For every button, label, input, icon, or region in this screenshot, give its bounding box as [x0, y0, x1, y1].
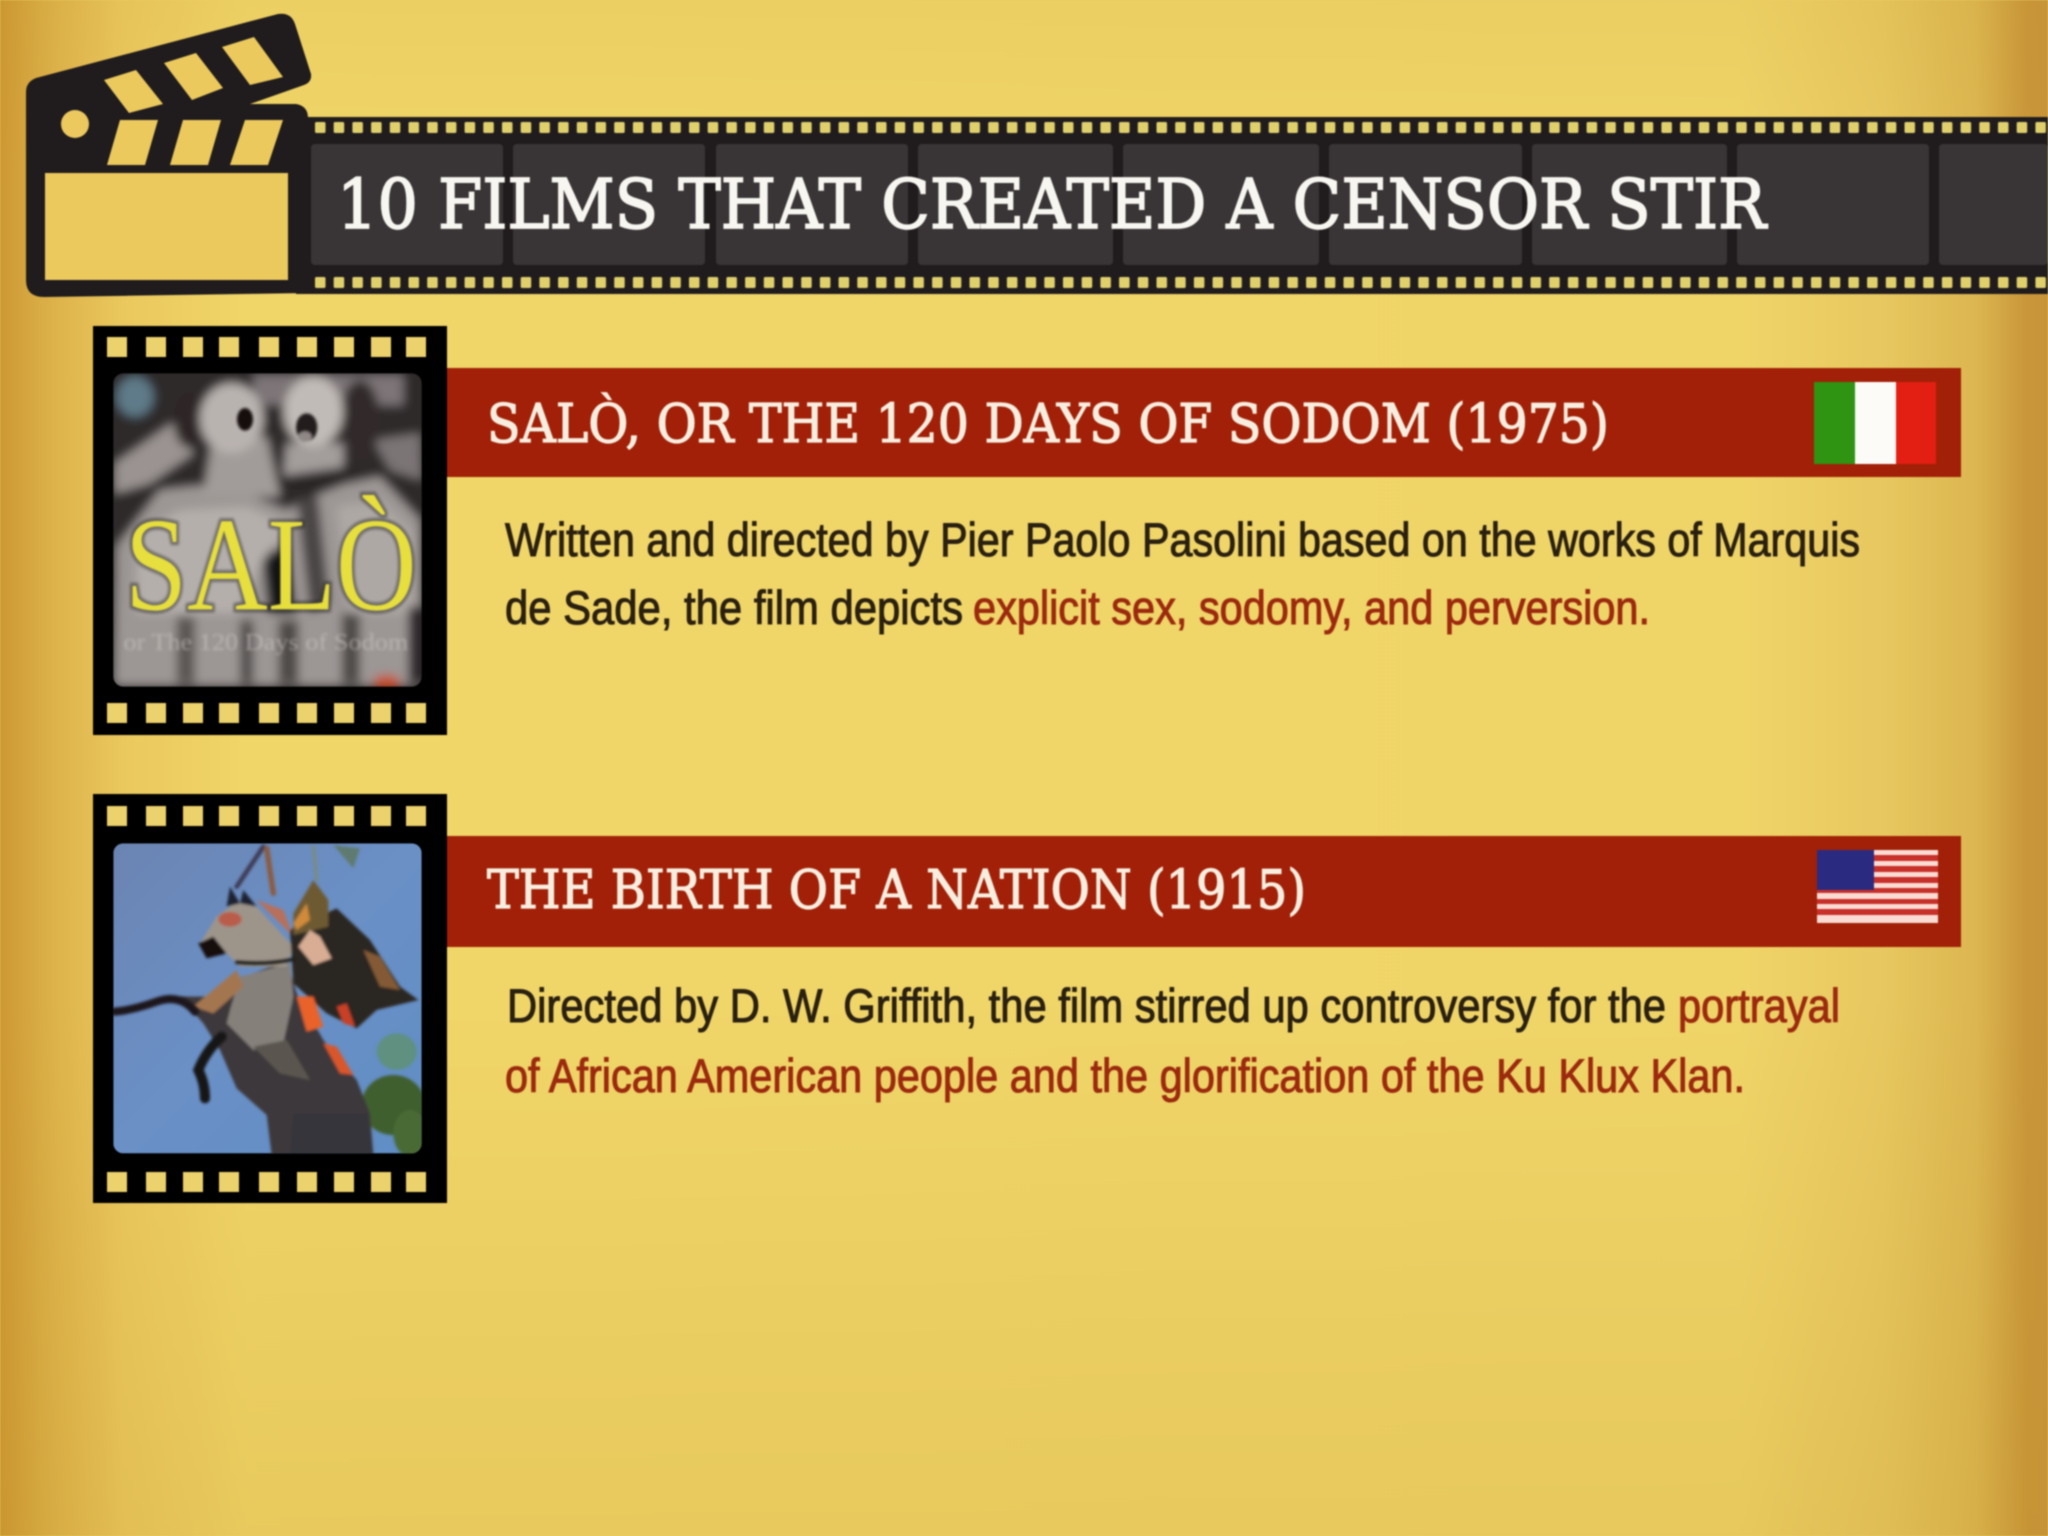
- red title bar: [447, 836, 1961, 947]
- description: Directed by D. W. Griffith, the film stirred up controversy for the: [507, 979, 1666, 1032]
- description: portrayal: [1678, 979, 1840, 1032]
- header banner: [26, 14, 2048, 297]
- panel: The Birth of a Nation: [93, 794, 1961, 1203]
- film frame with poster: [93, 794, 447, 1203]
- film title: THE BIRTH OF A NATION (1915): [487, 860, 1306, 921]
- description: of African American people and the glorification of the Ku Klux Klan.: [505, 1049, 1745, 1102]
- icon: US flag: [1817, 850, 1938, 923]
- poster title text fill: SALÒ: [125, 490, 417, 638]
- poster: rider on rearing horse: [113, 843, 427, 1157]
- description: [505, 979, 1840, 1102]
- description: [505, 513, 1860, 634]
- title: 10 FILMS THAT CREATED A CENSOR STIR: [337, 166, 1768, 245]
- poster subtitle text: or The 120 Days of Sodom: [123, 629, 408, 656]
- red title bar: [447, 368, 1961, 477]
- panel: Salo: [93, 326, 1961, 735]
- icon: clapperboard: [26, 14, 311, 297]
- poster title shadow: SALÒ: [125, 490, 417, 638]
- poster: Salo: [107, 367, 428, 693]
- film title: SALÒ, OR THE 120 DAYS OF SODOM (1975): [487, 393, 1609, 455]
- film strip: [296, 117, 2048, 294]
- description: de Sade, the film depicts: [505, 581, 963, 634]
- description: explicit sex, sodomy, and perversion.: [973, 581, 1650, 634]
- film frame with poster: [93, 326, 447, 735]
- icon: Italian flag: [1814, 382, 1936, 464]
- description: Written and directed by Pier Paolo Pasolini based on the works of Marquis: [505, 513, 1860, 566]
